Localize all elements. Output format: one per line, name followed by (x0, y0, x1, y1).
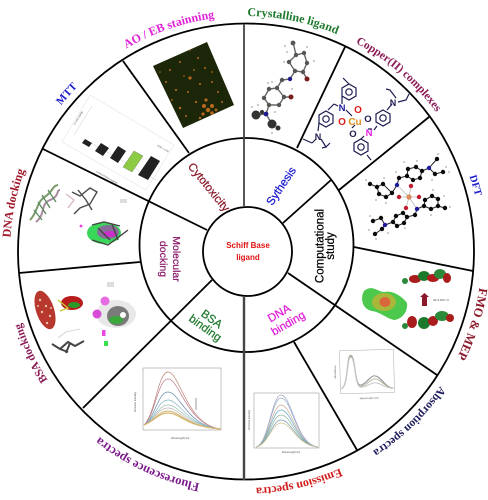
section label: DNA binding: binding (269, 309, 308, 338)
structure: crystalline ligand ball and stick (251, 41, 315, 134)
label: DNA docking: DNA docking (2, 168, 26, 238)
center label: Schiff Base ligand: Schiff Base (226, 241, 270, 250)
structure: copper(II) complex: O (364, 114, 372, 125)
image: BSA docking models (30, 282, 136, 353)
image: DFT optimized structure (365, 153, 451, 240)
section label: BSA binding: binding (186, 313, 223, 344)
center label: Schiff Base ligand: ligand (236, 253, 260, 262)
chart: MTT bar chart: Concentration (µg/ml) (96, 170, 118, 185)
structure: copper(II) complex: N (339, 103, 346, 114)
structure: copper(II) complex: O (338, 117, 346, 128)
image: FMO orbitals and MEP surface: ΔE=3.4867 eV (433, 299, 450, 302)
label: MTT: MTT (56, 82, 76, 106)
chart: fluorescence spectra (134, 368, 221, 440)
chart: absorption spectra (333, 349, 395, 401)
HOMO-LUMO gap arrow (420, 293, 429, 306)
chart: absorption spectra: Wavelength (nm) (360, 397, 379, 400)
section label: Molecular docking (157, 236, 182, 282)
section label: BSA binding: BSA (198, 308, 224, 331)
MEP surface (362, 288, 407, 320)
structure: copper(II) complex: N (390, 98, 396, 108)
section label: Synthesis: Sythesis (265, 165, 299, 208)
ligand in DNA (66, 188, 97, 214)
label: BSA docking: BSA docking (16, 322, 48, 384)
structure: copper(II) complex: O (354, 105, 362, 116)
label: Crystalline ligand: Crystalline ligand (248, 8, 340, 34)
section label: DNA binding: DNA (266, 302, 293, 325)
label: Emission spectra: Emission spectra (256, 468, 343, 494)
chart: fluorescence spectra: Wavelength(nm) (171, 437, 189, 440)
section label: Molecular docking: Molecular (170, 236, 182, 282)
center label: Schiff Base ligand (226, 241, 270, 262)
section label: Cytotoxicity: Cytotoxicity (185, 161, 232, 214)
structure: copper(II) complex (303, 78, 409, 160)
label: DFT: DFT (470, 174, 482, 195)
chart: emission spectra: Wavelength(nm) (282, 451, 300, 454)
label: AO / EB stainning: AO / EB stainning (125, 12, 214, 48)
structure: copper(II) complex: O (349, 129, 357, 140)
upper orbital (402, 269, 451, 284)
label: Copper(II) complexes: Copper(II) complexes (357, 38, 440, 112)
chart: absorption spectra: Absorbance (334, 365, 337, 379)
chart: MTT bar chart: IC50 = 0.00 (156, 144, 170, 154)
binding pocket (87, 222, 121, 244)
lower orbital (402, 311, 454, 329)
chart: fluorescence spectra: Emission Intensity (134, 391, 137, 412)
image: DNA docking models (30, 185, 128, 245)
image: AO/EB stained cells micrograph (153, 42, 234, 128)
structure: copper(II) complex: N (366, 128, 373, 139)
structure: copper(II) complex: Cu (348, 117, 362, 128)
section label: Computational study: Computational (314, 209, 326, 283)
DNA helix (30, 185, 60, 222)
chart: emission spectra: Emission Intensity (248, 409, 251, 430)
label: Fluorescence spectra: Fluorescence spectra (97, 437, 200, 492)
section label: Molecular docking: docking (157, 241, 169, 277)
structure: copper(II) complex: N (315, 132, 321, 142)
section label: Computational study (314, 209, 337, 283)
chart: emission spectra (248, 393, 319, 454)
section label: Computational study: study (325, 232, 337, 260)
label: Absorption spectra: Absorption spectra (372, 386, 444, 455)
chart: MTT bar chart (62, 95, 174, 190)
chart: MTT bar chart: % cell viability (73, 110, 84, 126)
image: FMO orbitals and MEP surface (362, 269, 454, 329)
